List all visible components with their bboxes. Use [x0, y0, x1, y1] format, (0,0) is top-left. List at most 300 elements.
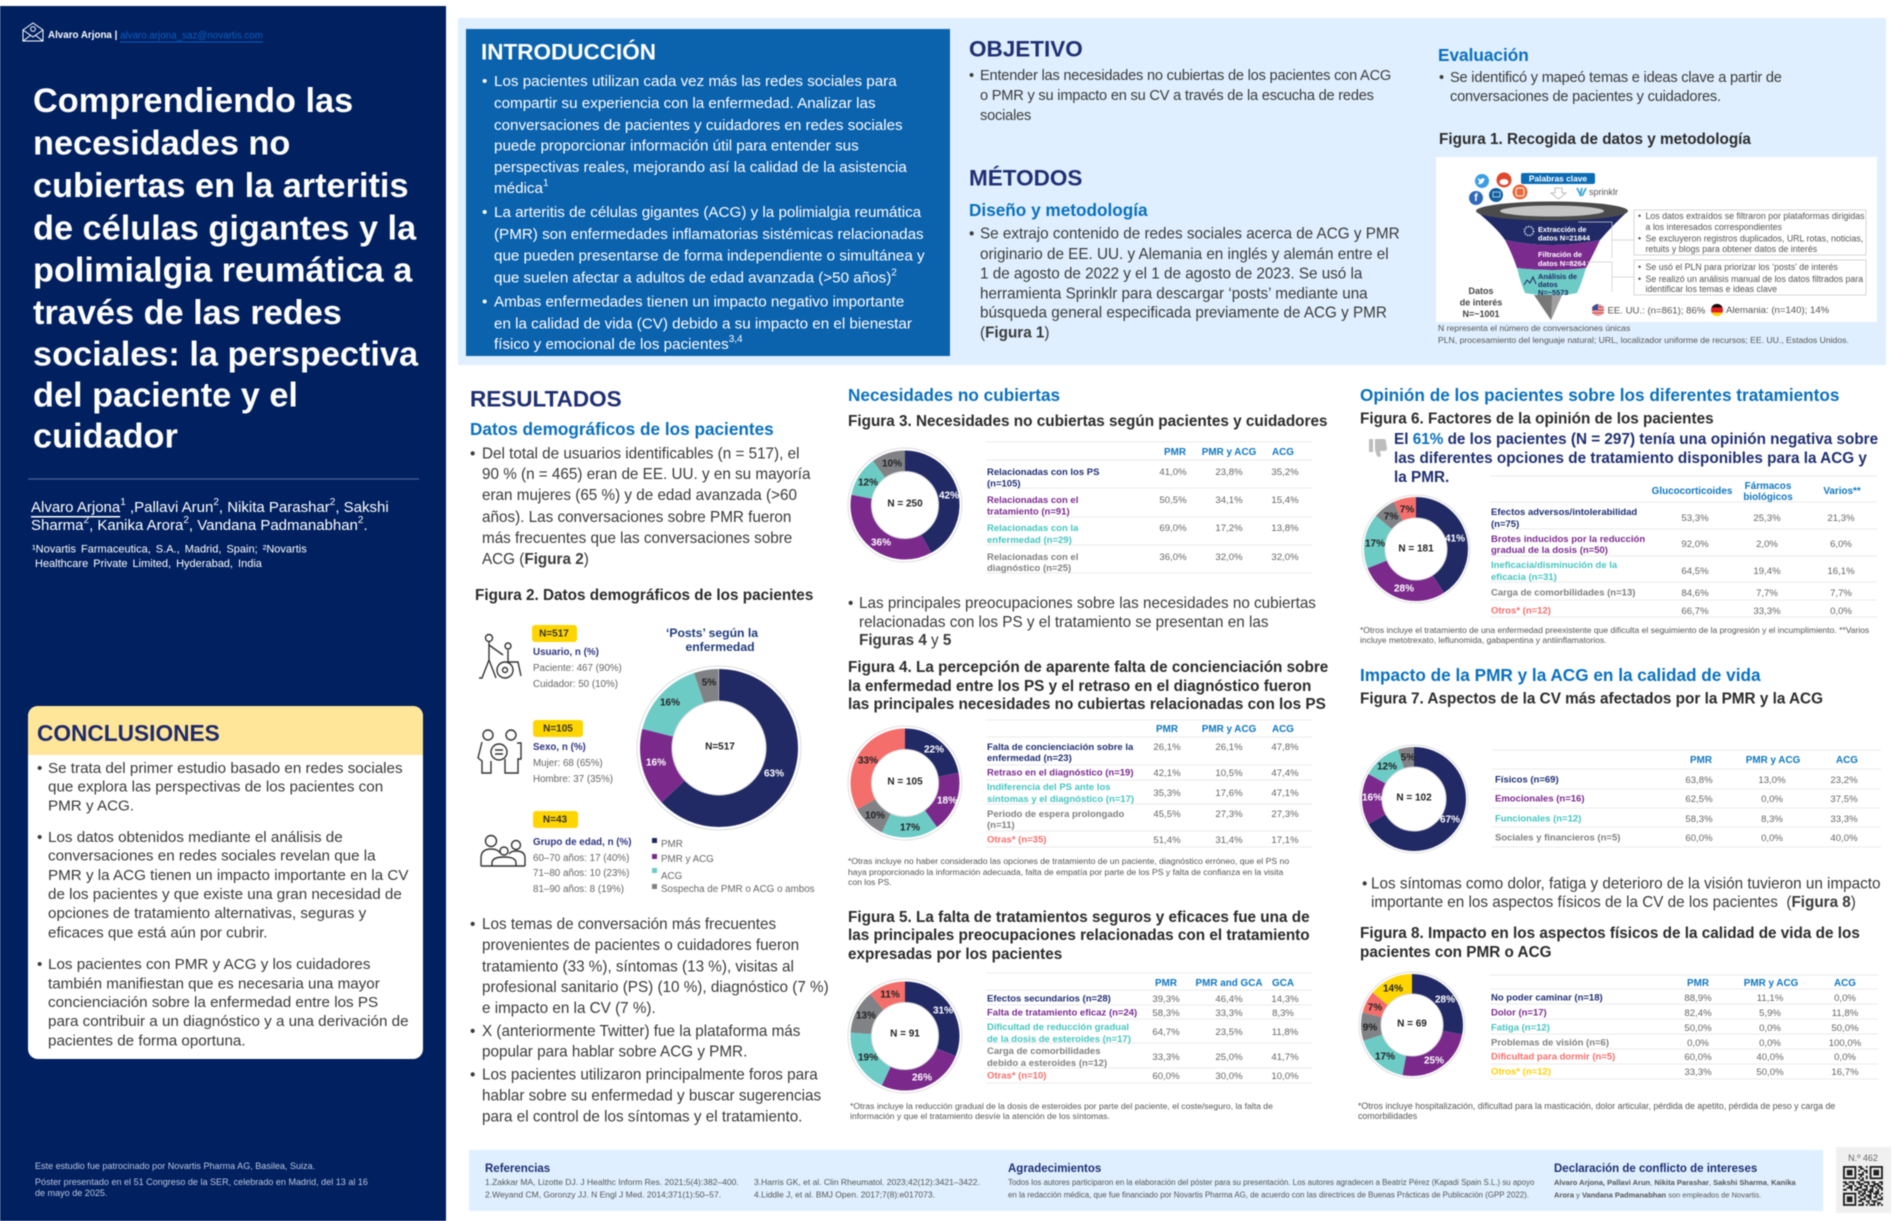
table: figure 6: Brotes inducidos por la reducción [1491, 534, 1645, 544]
table: figure 3: 15,4% [1271, 494, 1299, 506]
subheading: impacto: Impacto de la PMR y la ACG en la calidad de vida [1360, 665, 1761, 685]
label: datos de interés: Datos [1468, 286, 1494, 296]
introduction text: puede proporcionar información útil para entender sus [494, 137, 859, 154]
table: figure 5: 8,3% [1272, 1008, 1294, 1018]
figure 4 footnote: haya proporcionado la información adecuada, falta de empatía por parte de los PS y falta de confianza en la visita [848, 867, 1284, 877]
donut: figure 8: N = 69 [1397, 1018, 1427, 1030]
funnel: datos [1538, 280, 1558, 288]
conversation topics text: Los temas de conversación más frecuentes [482, 916, 777, 932]
introduction text: médica [494, 180, 544, 196]
table: figure 5: Otras* (n=10) [987, 1070, 1046, 1082]
table: figure 8: 0,0% [1759, 1022, 1781, 1034]
badge: N=105 [533, 720, 583, 737]
donut: figure 8: 28% [1435, 994, 1455, 1006]
table: figure 5: de la dosis de esteroides (n=17) [987, 1034, 1131, 1044]
donut: figure 7: 67% [1440, 814, 1460, 826]
donut: figure 6: 41% [1445, 534, 1465, 544]
table: figure 4: 26,1% [1215, 742, 1243, 752]
table: figure 3: 32,0% [1271, 552, 1299, 562]
table: figure 4: 10,5% [1215, 768, 1243, 778]
table: figure 4: enfermedad (n=23) [987, 752, 1072, 764]
donut: figure 3: N = 250 [887, 498, 923, 510]
donut: figure 7: 12% [1377, 762, 1397, 772]
donut: posts by disease: N=517 [705, 742, 735, 752]
title: cuidador [33, 418, 178, 456]
donut: posts by disease: 5% [702, 678, 716, 688]
donut: figure 8: 14% [1383, 984, 1403, 994]
donut: figure 5: 11% [880, 990, 900, 1000]
methods text: 1 de agosto de 2022 y el 1 de agosto de 2023. Se usó la [980, 265, 1363, 282]
table: figure 8: Fatiga (n=12) [1491, 1022, 1550, 1034]
text: main concerns: • [848, 594, 853, 612]
table: figure 3: 36,0% [1159, 552, 1187, 562]
text: symptoms impact: • [1362, 875, 1367, 892]
user stats: Paciente: 467 (90%) [533, 662, 622, 674]
table: figure 5: PMR and GCA [1196, 978, 1262, 988]
donut: figure 4: 22% [924, 744, 944, 756]
table: figure 6: 19,4% [1753, 566, 1781, 576]
label: datos de interés: de interés [1460, 298, 1502, 308]
conflict of interest: Arora y Vandana Padmanabhan son empleados de Novartis. [1554, 1190, 1761, 1199]
introduction text: 1 [543, 178, 549, 188]
acknowledgements [1008, 1163, 1535, 1199]
introduction text: Los pacientes utilizan cada vez más las redes sociales para [494, 72, 897, 90]
table: figure 4: (n=11) [987, 820, 1015, 830]
table: figure 7: Físicos (n=69) [1495, 774, 1559, 786]
figure 4 title: Figura 4. La percepción de aparente falta de concienciación sobre [848, 658, 1328, 676]
table: figure 7: 60,0% [1685, 832, 1713, 844]
demographics text: • [470, 445, 475, 462]
table: figure 4: Indiferencia del PS ante los [987, 782, 1111, 792]
poster number and QR code [1836, 1147, 1891, 1213]
donut: figure 3: 36% [871, 538, 891, 548]
introduction text: (PMR) son enfermedades inflamatorias sistémicas relacionadas [494, 226, 924, 242]
table: figure 5: 10,0% [1271, 1070, 1299, 1082]
table: figure 6: 25,3% [1753, 512, 1781, 524]
donut: figure 5: N = 91 [890, 1028, 920, 1040]
table: figure 7: ACG [1836, 754, 1858, 766]
table: figure 5: Falta de tratamiento eficaz (n=24) [987, 1008, 1137, 1018]
table: figure 6: gradual de la dosis (n=50) [1491, 544, 1608, 556]
donut: figure 3: 10% [882, 458, 902, 470]
poster number and QR code: N.º 462 [1848, 1153, 1878, 1163]
table: figure 8: ACG [1834, 978, 1856, 988]
table: figure 8: 0,0% [1687, 1038, 1709, 1048]
table: figure 4: 47,8% [1271, 742, 1299, 752]
conclusions text: pacientes de forma oportuna. [48, 1032, 246, 1049]
donut: figure 4: 17% [900, 822, 920, 834]
introduction text: • [482, 293, 487, 310]
icon: thumbs down [1369, 439, 1387, 457]
donut: figure 6: 7% [1400, 504, 1414, 516]
filter box 2: • [1638, 262, 1641, 272]
objective text: o PMR y su impacto en su CV a través de la escucha de redes [980, 88, 1374, 104]
donut title: enfermedad [685, 640, 755, 654]
table: figure 8: PMR y ACG [1744, 978, 1799, 988]
table: figure 6: 6,0% [1830, 538, 1852, 550]
table: figure 6: 53,3% [1681, 512, 1709, 524]
objective text: sociales [980, 108, 1031, 124]
funnel: datos N=8264 [1538, 258, 1587, 268]
objective text: Entender las necesidades no cubiertas de los pacientes con ACG [980, 68, 1391, 84]
references [485, 1163, 980, 1200]
donut: figure 8: 9% [1363, 1022, 1377, 1034]
filter box 1: • [1638, 211, 1641, 221]
subheading: opinión: Opinión de los pacientes sobre los diferentes tratamientos [1360, 385, 1839, 405]
table: figure 4: 27,3% [1215, 808, 1243, 820]
table: figure 3: 32,0% [1215, 552, 1243, 562]
table: figure 5: Dificultad de reducción gradual [987, 1022, 1129, 1032]
sponsor note: de mayo de 2025. [35, 1188, 107, 1198]
figure 7 title: Figura 7. Aspectos de la CV más afectados por la PMR y la ACG [1360, 690, 1823, 708]
callout: negative opinion: El 61% de los pacientes (N = 297) tenía una opinión negativa sobre [1394, 430, 1878, 448]
heading: métodos: MÉTODOS [969, 166, 1082, 190]
authors: , Vandana Padmanabhan [189, 516, 358, 534]
table: figure 3: 50,5% [1159, 494, 1187, 506]
table: figure 6: 64,5% [1681, 566, 1709, 576]
age stats: 81–90 años: 8 (19%) [533, 884, 624, 894]
demographics text: más frecuentes que las conversaciones sobre [482, 530, 792, 546]
table: figure 4: 47,1% [1271, 788, 1299, 798]
table: figure 3: 13,8% [1271, 522, 1299, 534]
table: figure 6: Ineficacia/disminución de la [1491, 560, 1618, 570]
table: figure 3: PMR y ACG [1202, 446, 1257, 458]
title: través de las redes [33, 294, 342, 332]
table: figure 4: Periodo de espera prolongado [987, 808, 1124, 820]
evaluation text: conversaciones de pacientes y cuidadores. [1450, 89, 1721, 105]
authors: 2 [330, 496, 336, 508]
authors: , Nikita Parashar [219, 498, 330, 516]
figure 2 title: Figura 2. Datos demográficos de los pacientes [475, 587, 813, 604]
conclusions text: Los datos obtenidos mediante el análisis de [48, 828, 343, 846]
table: figure 6: 0,0% [1830, 606, 1852, 616]
table: figure 8: 16,7% [1831, 1066, 1859, 1078]
filter box 2: Se realizó un análisis manual de los datos filtrados para [1646, 274, 1863, 284]
table: figure 4: 51,4% [1153, 834, 1181, 846]
table: figure 4: ACG [1272, 724, 1294, 734]
heading: resultados: RESULTADOS [470, 386, 622, 412]
table: figure 5: Carga de comorbilidades [987, 1046, 1101, 1056]
panel: top band [458, 18, 1886, 365]
table: figure 3: tratamiento (n=91) [987, 506, 1070, 517]
table: figure 6: Fármacos [1745, 480, 1792, 492]
donut: figure 6 [1362, 495, 1470, 603]
figure 4 title: las principales necesidades no cubiertas relacionadas con los PS [848, 696, 1326, 712]
table: figure 5: 11,8% [1272, 1026, 1299, 1038]
table: figure 7: 0,0% [1761, 832, 1783, 844]
authors: Alvaro Arjona [31, 498, 121, 516]
conversation topics text: provenientes de pacientes o cuidadores fueron [482, 936, 799, 954]
icon: email envelope [23, 23, 43, 41]
methods text: herramienta Sprinklr para descargar ‘posts’ mediante una [980, 285, 1368, 302]
table: figure 5: 64,7% [1152, 1026, 1180, 1038]
heading: objetivo: OBJETIVO [969, 36, 1083, 62]
donut: figure 8: 17% [1375, 1052, 1395, 1062]
table: figure 7 [1492, 750, 1881, 847]
table: figure 3: Relacionadas con el [987, 552, 1078, 562]
evaluation text: Se identificó y mapeó temas e ideas clave a partir de [1450, 70, 1782, 86]
donut title: ‘Posts’ según la [666, 626, 758, 640]
table: figure 6: eficacia (n=31) [1491, 572, 1557, 582]
donut: figure 5 [848, 979, 962, 1093]
donut: figure 8: 25% [1424, 1056, 1444, 1066]
table: figure 4: Retraso en el diagnóstico (n=19) [987, 768, 1134, 778]
authors: , Sakshi [335, 498, 389, 516]
methods text: originario de EE. UU. y Alemania en inglés y alemán entre el [980, 246, 1389, 262]
table: figure 3: Relacionadas con la [987, 522, 1079, 534]
donut: figure 4: 33% [858, 756, 878, 766]
filter box 2: • [1638, 274, 1641, 284]
demographics text: 90 % (n = 465) eran de EE. UU. y en su mayoría [482, 466, 811, 482]
figure 8 footnote: *Otros incluye hospitalización, dificultad para la masticación, dolor articular, pérdida de apetito, pérdida de peso y carga de [1358, 1101, 1835, 1111]
conversation topics text: • [470, 916, 475, 932]
authors: Sharma [31, 516, 84, 534]
icon: sex [478, 730, 521, 773]
user stats: Usuario, n (%) [533, 646, 599, 658]
table: figure 6: Varios** [1823, 486, 1861, 496]
table: figure 7: 23,2% [1830, 774, 1858, 786]
table: figure 4: 26,1% [1153, 742, 1181, 752]
table: figure 4: PMR [1156, 724, 1178, 734]
figure 5 title: Figura 5. La falta de tratamientos seguros y eficaces fue una de [848, 908, 1310, 926]
conversation topics text: para el control de los síntomas y el tratamiento. [482, 1108, 802, 1125]
authors: 2 [358, 514, 364, 526]
table: figure 7: 0,0% [1761, 794, 1783, 804]
table: figure 3: enfermedad (n=29) [987, 534, 1072, 546]
badge: N=517: N=517 [539, 628, 569, 640]
table: figure 7: 13,0% [1758, 774, 1786, 786]
filter box 2: identificar los temas e ideas clave [1646, 284, 1777, 294]
methods text: Se extrajo contenido de redes sociales acerca de ACG y PMR [980, 225, 1400, 242]
figure 3 title: Figura 3. Necesidades no cubiertas según pacientes y cuidadores [848, 413, 1327, 430]
table: figure 3: 23,8% [1215, 466, 1243, 478]
objective text: • [969, 68, 974, 84]
introduction text: Ambas enfermedades tienen un impacto negativo importante [494, 293, 904, 310]
references: Referencias [485, 1163, 550, 1175]
figure 5 title: expresadas por los pacientes [848, 946, 1062, 962]
table: figure 8: 0,0% [1759, 1038, 1781, 1048]
table: figure 8: Problemas de visión (n=6) [1491, 1038, 1609, 1048]
badge: N=105: N=105 [543, 724, 573, 734]
affiliations: ¹Novartis Farmaceutica, S.A., Madrid, Spain; ²Novartis [32, 544, 307, 556]
age stats: 60–70 años: 17 (40%) [533, 852, 629, 864]
badge: N=43: N=43 [543, 814, 568, 826]
conversation topics text: X (anteriormente Twitter) fue la plataforma más [482, 1022, 801, 1040]
authors: 1 [120, 496, 126, 508]
authors: 2 [84, 514, 90, 526]
figure 1 title: Figura 1. Recogida de datos y metodología [1439, 131, 1751, 148]
sprinklr logo: sprinklr [1589, 187, 1618, 197]
authors: ,Pallavi Arun [126, 498, 213, 516]
donut: figure 6: N = 181 [1398, 544, 1434, 554]
conflict of interest [1554, 1163, 1796, 1199]
legend: PMR y ACG [661, 854, 714, 864]
donut: posts by disease: 63% [764, 768, 784, 780]
introduction text: perspectivas reales, mejorando así la calidad de la asistencia [494, 158, 907, 176]
donut: figure 4: 10% [865, 810, 885, 822]
donut: figure 4: N = 105 [887, 776, 923, 788]
table: figure 6: 7,7% [1756, 588, 1778, 598]
donut: figure 8 [1359, 972, 1465, 1078]
table: figure 7: 33,3% [1830, 814, 1858, 824]
country USA: EE. UU.: (n=861); 86% [1608, 306, 1706, 316]
title: necesidades no [33, 124, 290, 162]
methods text: • [969, 225, 974, 242]
subheading: demográficos: Datos demográficos de los pacientes [470, 419, 774, 439]
table: figure 6: 66,7% [1681, 606, 1709, 616]
table: figure 8: 50,0% [1684, 1022, 1712, 1034]
table: figure 7: 62,5% [1685, 794, 1713, 804]
table: figure 4: 35,3% [1153, 788, 1181, 798]
donut: figure 5: 19% [858, 1052, 878, 1064]
table: figure 5: 30,0% [1215, 1070, 1243, 1082]
donut: posts by disease: 16% [646, 758, 666, 768]
introduction text: conversaciones de pacientes y cuidadores en redes sociales [494, 116, 903, 134]
title: sociales: la perspectiva [33, 336, 419, 374]
table: figure 8: Dolor (n=17) [1491, 1008, 1547, 1018]
badge: N=517 [532, 625, 577, 642]
table: figure 3: Relacionadas con el [987, 494, 1078, 506]
panel: introduction [466, 29, 950, 356]
icon: arrow [1551, 188, 1566, 199]
age stats: 71–80 años: 10 (23%) [533, 868, 629, 878]
conclusions text: PMR y ACG. [48, 797, 134, 814]
legend: Sospecha de PMR o ACG o ambos [661, 884, 815, 894]
conversation topics text: • [470, 1022, 475, 1040]
conclusions text: • [37, 760, 42, 776]
sex stats: Hombre: 37 (35%) [533, 774, 613, 784]
filter box 1 [1634, 210, 1866, 255]
title: Comprendiendo las [33, 82, 353, 120]
conflict of interest: Declaración de conflicto de intereses [1554, 1163, 1757, 1175]
table: figure 5: 25,0% [1215, 1052, 1243, 1062]
icon: caregiver and wheelchair [479, 634, 521, 678]
authors: 2 [213, 496, 219, 508]
figure 6 footnote: *Otros incluye el tratamiento de una enfermedad preexistente que dificulta el seguimiento de la progresión y el incumplimiento. **Varios [1360, 625, 1869, 635]
conclusions text: conversaciones en redes sociales revelan que la [48, 847, 376, 864]
heading: introducción: INTRODUCCIÓN [481, 40, 656, 64]
table: figure 4: 31,4% [1215, 834, 1243, 846]
callout: negative opinion: la PMR. [1394, 468, 1449, 486]
funnel: datos N=21844 [1538, 233, 1591, 242]
icons: social networks: f [1474, 192, 1478, 204]
introduction text: que pueden presentarse de forma independiente o simultánea y [494, 247, 925, 264]
label: datos de interés: N=~1001 [1462, 309, 1500, 319]
funnel: Extracción de [1538, 224, 1586, 234]
conclusions text: de los pacientes y que existe una gran necesidad de [48, 886, 402, 902]
references: 4.Liddle J, et al. BMJ Open. 2017;7(8):e017073. [754, 1190, 935, 1200]
figure 1 footnote: PLN, procesamiento del lenguaje natural; URL, localizador uniforme de recursos; EE. UU., Estados Unidos. [1438, 335, 1849, 345]
table: figure 6: Glucocorticoides [1652, 486, 1733, 496]
table: figure 5: 60,0% [1152, 1070, 1180, 1082]
table: figure 8: PMR [1687, 978, 1709, 988]
table: figure 8: 11,8% [1832, 1008, 1859, 1018]
conclusions text: también manifiestan que es necesaria una mayor [48, 975, 380, 992]
acknowledgements: Todos los autores participaron en la elaboración del póster para su presentación. Los autores agradecen a Beatriz Pérez (Kapadi Spain S.L.) su apoyo [1008, 1178, 1535, 1186]
table: figure 6: Otros* (n=12) [1491, 606, 1551, 616]
conversation topics text: profesional sanitario (PS) (10 %), diagnóstico (7 %) [482, 978, 829, 996]
panel: conclusions [28, 706, 423, 1059]
table: figure 7: 8,3% [1761, 814, 1783, 824]
heading: conclusions: CONCLUSIONES [37, 720, 220, 746]
flag: Germany [1711, 304, 1723, 316]
donut: figure 7 [1360, 745, 1468, 853]
sponsor note: Este estudio fue patrocinado por Novartis Pharma AG, Basilea, Suiza. [35, 1161, 315, 1171]
introduction text: físico y emocional de los pacientes [494, 336, 729, 352]
table: figure 6 [1490, 476, 1877, 617]
donut: figure 5: 13% [856, 1010, 876, 1022]
table: figure 5 [986, 973, 1312, 1083]
conclusions text: Los pacientes con PMR y ACG y los cuidadores [48, 956, 371, 972]
authors: 2 [183, 514, 189, 526]
authors: , Kanika Arora [89, 516, 184, 534]
table: figure 3: diagnóstico (n=25) [987, 562, 1071, 574]
country Germany: Alemania: (n=140); 14% [1726, 305, 1830, 316]
demographics text: ACG (Figura 2) [482, 550, 589, 568]
table: figure 5: PMR [1155, 978, 1177, 988]
demographics text: Del total de usuarios identificables (n = 517), el [482, 445, 799, 462]
table: figure 8: No poder caminar (n=18) [1491, 992, 1603, 1004]
filter box 2: Se usó el PLN para priorizar los ‘posts’ de interés [1646, 262, 1838, 272]
table: figure 8: Otros* (n=12) [1491, 1066, 1551, 1078]
table: figure 8: 82,4% [1684, 1008, 1712, 1018]
icons: social networks [1469, 172, 1528, 205]
table: figure 5: 14,3% [1271, 994, 1299, 1004]
title: cubiertas en la arteritis [33, 167, 409, 205]
table: figure 5: 58,3% [1152, 1008, 1180, 1018]
table: figure 5: Efectos secundarios (n=28) [987, 994, 1111, 1004]
filter box 2 [1634, 260, 1866, 295]
table: figure 8: 11,1% [1757, 992, 1784, 1004]
conversation topics text: hablar sobre su enfermedad y buscar sugerencias [482, 1087, 821, 1104]
age stats: Grupo de edad, n (%) [533, 836, 632, 848]
table: figure 7: Sociales y financieros (n=5) [1495, 832, 1620, 844]
table: figure 8: 50,0% [1756, 1066, 1784, 1078]
table: figure 4: 45,5% [1153, 808, 1181, 820]
title: polimialgia reumática a [33, 252, 413, 290]
figure 6 footnote: incluye metotrexato, leflunomida, gabapentina y antiinflamatorios. [1360, 635, 1607, 645]
figure 1 footnote: N representa el número de conversaciones únicas [1438, 323, 1630, 333]
filter box 1: Se excluyeron registros duplicados, URL rotas, noticias, [1646, 234, 1863, 244]
donut: figure 6: 28% [1394, 584, 1414, 594]
references: 2.Weyand CM, Goronzy JJ. N Engl J Med. 2014;371(1):50–57. [485, 1190, 721, 1200]
sponsor note: Póster presentado en el 51 Congreso de la SER, celebrado en Madrid, del 13 al 16 [35, 1177, 368, 1187]
conclusions text: • [37, 956, 42, 972]
legend [652, 838, 815, 894]
table: figure 3: 34,1% [1215, 494, 1243, 506]
filter box 1: • [1638, 234, 1641, 244]
title: del paciente y el [33, 376, 298, 414]
introduction text: La arteritis de células gigantes (ACG) y la polimialgia reumática [494, 204, 922, 220]
evaluation text: • [1439, 70, 1444, 86]
table: figure 4: 47,4% [1271, 768, 1299, 778]
table: figure 7: PMR [1690, 754, 1712, 766]
table: figure 7: 37,5% [1830, 794, 1858, 804]
conflict of interest: Alvaro Arjona, Pallavi Arun, Nikita Parashar, Sakshi Sharma, Kanika [1554, 1178, 1796, 1186]
user stats: Cuidador: 50 (10%) [533, 678, 618, 690]
acknowledgements: Agradecimientos [1008, 1163, 1101, 1175]
affiliations: Healthcare Private Limited, Hyderabad, India [35, 558, 263, 570]
figure 4 footnote: con los PS. [848, 877, 892, 887]
donut: posts by disease [637, 666, 801, 830]
donut: figure 8: 7% [1368, 1002, 1382, 1014]
figure 4 footnote: *Otras incluye no haber considerado las opciones de tratamiento de un paciente, diagnóstico erróneo, que el PS no [848, 856, 1289, 866]
conversation topics text: Los pacientes utilizaron principalmente foros para [482, 1066, 818, 1083]
table: figure 8: 0,0% [1834, 992, 1856, 1004]
table: figure 3 [986, 442, 1312, 574]
table: figure 5: 41,7% [1271, 1052, 1299, 1062]
text: main concerns: Figuras 4 y 5 [859, 632, 951, 648]
